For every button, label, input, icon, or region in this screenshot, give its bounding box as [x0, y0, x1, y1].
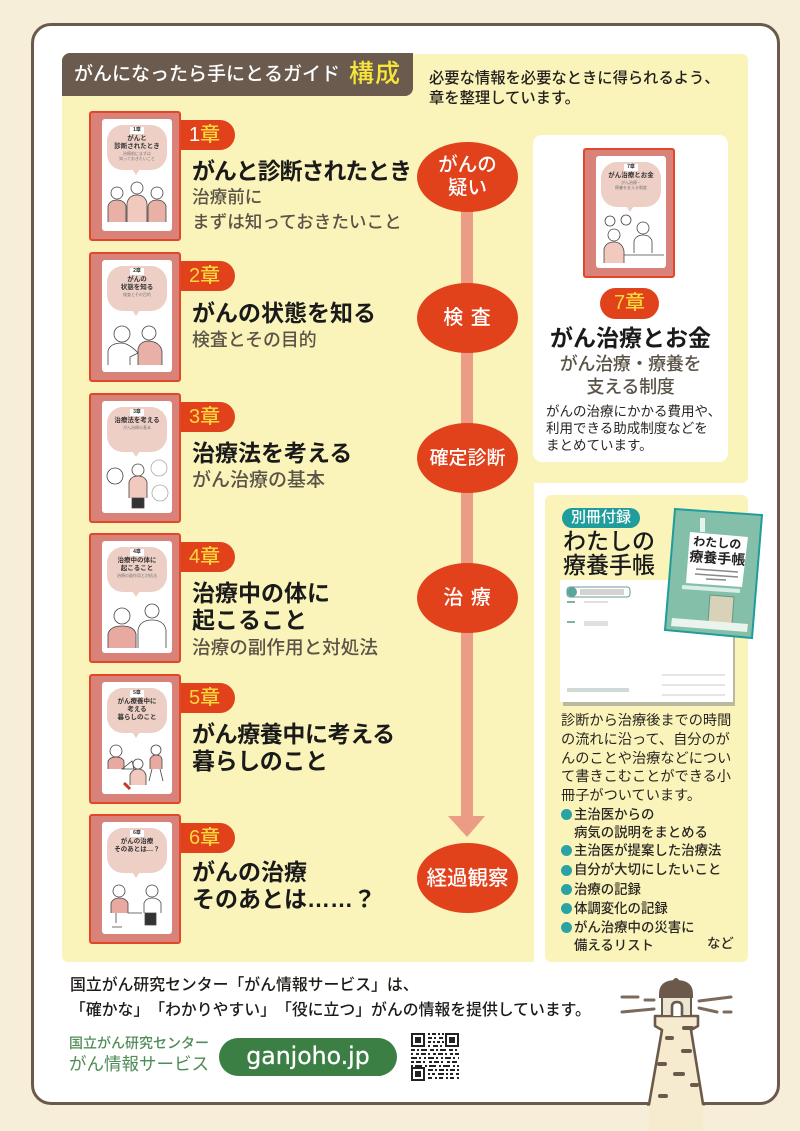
chapter 6 title: そのあとは……？: [192, 886, 376, 912]
checklist item 6: [574, 920, 695, 953]
chapter 1 cover: 治療前にまずは: [123, 151, 151, 156]
heading text: がんになったら手にとるガイド: [74, 64, 340, 85]
intro text: 必要な情報を必要なときに得られるよう、: [429, 70, 720, 87]
chapter 1 cover: [89, 111, 181, 241]
bullet: [561, 809, 572, 820]
bullet: [561, 845, 572, 856]
chapter 7 cover: 7章: [627, 164, 635, 170]
chapter 1 title: がんと診断されたとき: [192, 158, 411, 184]
timeline node: がんの疑い: がんの: [438, 154, 497, 176]
chapter 6 cover: 6章: [133, 830, 141, 836]
checklist item 1: [574, 807, 708, 840]
chapter 5 title: [192, 721, 395, 774]
notebook spread: [560, 580, 735, 706]
chapter 5 cover: [89, 674, 181, 804]
chapter 3 cover: 3章: [133, 409, 141, 415]
chapter 2 cover: がんの: [127, 276, 147, 283]
timeline node: 確定診断: 確定診断: [429, 448, 506, 468]
checklist item 2: 主治医が提案した治療法: [574, 843, 721, 858]
notebook description: の流れに沿って、自分のが: [561, 732, 730, 748]
chapter 2 subtitle: 検査とその目的: [192, 330, 317, 350]
chapter 4 cover: 起こること: [121, 565, 153, 572]
chapter 4 badge: 4章: [189, 546, 220, 568]
chapter 6 badge: [181, 823, 235, 853]
checklist item 1: 主治医からの: [574, 807, 654, 822]
chapter 4 title: 起こること: [192, 607, 307, 633]
chapter 3 subtitle: がん治療の基本: [192, 470, 325, 491]
timeline node: 治療: 治 療: [443, 586, 492, 608]
logo text: [69, 1035, 209, 1074]
chapter 5 cover: 考える: [127, 706, 147, 713]
chapter 6 title: がんの治療: [192, 859, 307, 885]
checklist item 3: 自分が大切にしたいこと: [574, 862, 721, 877]
chapter 7 description: がんの治療にかかる費用や、: [546, 404, 721, 419]
chapter 1 cover: がんと: [127, 135, 147, 142]
notebook cover: 療養手帳: [689, 548, 746, 568]
chapter 1 badge: 1章: [189, 124, 220, 146]
supplement badge: [562, 508, 640, 528]
chapter 6 cover: がんの治療: [121, 838, 153, 845]
checklist item 5: 体調変化の記録: [574, 901, 668, 916]
timeline node: 経過観察: 経過観察: [426, 866, 508, 890]
chapter 7 cover: [583, 148, 675, 278]
chapter 1 subtitle: 治療前に: [192, 187, 262, 207]
chapter 3 badge: [181, 402, 235, 432]
notebook description: 冊子がついています。: [561, 788, 701, 804]
bullet: [561, 922, 572, 933]
logo text: がん情報サービス: [69, 1054, 209, 1074]
notebook description: て書きこむことができる小: [561, 769, 731, 785]
chapter 1 cover: 診断されたとき: [114, 143, 160, 150]
checklist item 6: がん治療中の災害に: [574, 920, 695, 935]
chapter 5 cover: がん療養中に: [118, 698, 156, 705]
supplement badge: 別冊付録: [571, 509, 631, 526]
chapter 1 badge: [181, 120, 235, 150]
chapter 2 cover: 状態を知る: [121, 284, 153, 291]
intro text: [429, 70, 720, 107]
supplement title: [563, 528, 655, 578]
chapter 4 cover: 4章: [133, 549, 141, 555]
heading accent: 構成: [349, 60, 401, 88]
chapter 5 title: がん療養中に考える: [192, 721, 395, 747]
chapter 5 cover: 暮らしのこと: [118, 714, 156, 721]
chapter 2 cover: 検査とその目的: [123, 292, 151, 297]
chapter 4 subtitle: 治療の副作用と対処法: [192, 637, 378, 658]
url pill: ganjoho.jp: [246, 1042, 370, 1070]
panel: chapter 7: [533, 135, 728, 462]
chapter 2 cover: [89, 252, 181, 382]
chapter 7 description: [546, 404, 721, 453]
notebook description: [561, 712, 731, 804]
logo text: 国立がん研究センター: [69, 1035, 209, 1051]
chapter 2 cover: 2章: [133, 268, 141, 274]
notebook description: 診断から治療後までの時間: [561, 713, 731, 729]
yellow background: top right: [530, 54, 748, 483]
chapter 1 subtitle: まずは知っておきたいこと: [192, 212, 402, 232]
timeline node: 確定診断: [417, 423, 518, 493]
footer message: 「確かな」「わかりやすい」「役に立つ」がんの情報を提供しています。: [70, 1002, 591, 1019]
footer message: 国立がん研究センター「がん情報サービス」は、: [70, 977, 419, 994]
timeline node: 検査: [417, 283, 518, 353]
timeline node: 治療: [417, 563, 518, 633]
timeline node: がんの疑い: [417, 142, 518, 212]
chapter 7 cover: がん治療・: [621, 180, 641, 185]
chapter 6 cover: [89, 814, 181, 944]
chapter 2 title: がんの状態を知る: [192, 300, 376, 326]
chapter 7 cover: がん治療とお金: [608, 172, 654, 179]
checklist suffix: など: [707, 936, 734, 951]
chapter 5 badge: [181, 683, 235, 713]
timeline arrow: [448, 212, 485, 837]
chapter 3 cover: がん治療の基本: [123, 425, 151, 430]
chapter 3 badge: 3章: [189, 406, 220, 428]
url pill: [219, 1038, 397, 1076]
chapter 4 cover: 治療中の体に: [118, 557, 156, 564]
chapter 7 badge: [600, 288, 659, 319]
chapter 1 subtitle: [192, 187, 402, 232]
chapter 3 cover: [89, 393, 181, 523]
bullet: [561, 903, 572, 914]
chapter 7 description: 利用できる助成制度などを: [546, 421, 708, 436]
chapter 3 cover: 治療法を考える: [114, 417, 160, 424]
footer message: [70, 976, 591, 1019]
chapter 4 cover: [89, 533, 181, 663]
chapter 4 cover: 治療の副作用と対処法: [117, 573, 157, 578]
bullet: [561, 865, 572, 876]
chapter 2 badge: 2章: [189, 265, 220, 287]
chapter 7 subtitle: 支える制度: [587, 377, 674, 397]
chapter 5 title: 暮らしのこと: [192, 748, 328, 774]
chapter 6 badge: 6章: [189, 827, 220, 849]
supplement title: わたしの: [563, 528, 655, 554]
timeline node: がんの疑い: 疑い: [448, 177, 487, 199]
heading bar: [62, 53, 413, 96]
supplement title: 療養手帳: [563, 552, 655, 578]
chapter 7 title: がん治療とお金: [550, 325, 711, 351]
notebook cover: [664, 508, 764, 640]
chapter 7 badge: 7章: [614, 292, 645, 314]
chapter 5 cover: 5章: [133, 690, 141, 696]
chapter 7 cover: 療養を支える制度: [615, 185, 647, 190]
bullet: [561, 884, 572, 895]
intro text: 章を整理しています。: [429, 90, 580, 107]
timeline node: 検査: 検 査: [443, 306, 492, 328]
QR code: [411, 1033, 459, 1081]
notebook cover: わたしの: [693, 534, 742, 552]
chapter 1 cover: 1章: [133, 127, 141, 133]
chapter 7 subtitle: がん治療・療養を: [560, 354, 701, 374]
timeline node: 経過観察: [417, 843, 518, 913]
panel: supplement notebook: [545, 495, 748, 962]
chapter 4 title: [192, 580, 330, 633]
chapter 1 cover: 知っておきたいこと: [119, 156, 155, 161]
chapter 6 title: [192, 859, 376, 912]
chapter 4 badge: [181, 542, 235, 572]
chapter 7 subtitle: [560, 354, 701, 397]
chapter 4 title: 治療中の体に: [192, 580, 330, 606]
chapter 2 badge: [181, 261, 235, 291]
chapter 7 description: まとめています。: [546, 438, 653, 453]
chapter 6 cover: そのあとは…？: [114, 846, 160, 853]
chapter 5 badge: 5章: [189, 687, 220, 709]
checklist item 1: 病気の説明をまとめる: [574, 825, 708, 840]
chapter 3 title: 治療法を考える: [192, 440, 352, 466]
checklist item 4: 治療の記録: [574, 882, 641, 897]
checklist item 6: 備えるリスト: [574, 938, 654, 953]
yellow background: left column: [62, 54, 534, 962]
lighthouse illustration: [620, 978, 732, 1131]
notebook description: んのことや治療などについ: [561, 751, 731, 767]
